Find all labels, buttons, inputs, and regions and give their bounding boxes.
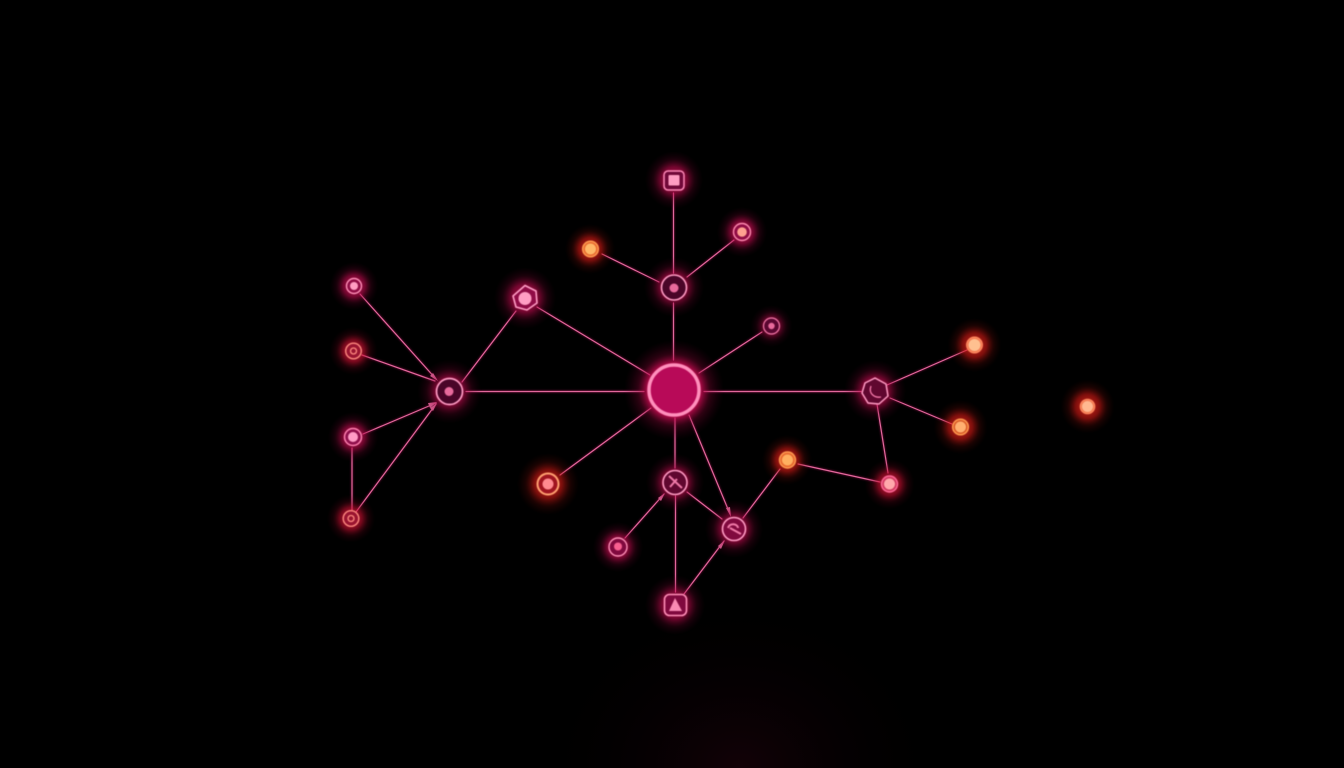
node: isolated far right	[1060, 380, 1114, 434]
node: lower left red	[517, 453, 579, 515]
node: far left bottom	[327, 494, 375, 542]
node: far left third	[328, 412, 378, 462]
node: orange upper left	[565, 224, 615, 274]
node: upper hub	[644, 257, 704, 317]
node: far left second	[330, 327, 378, 375]
node: right orange lower	[934, 400, 988, 454]
node: left hub	[418, 360, 482, 424]
connecting lines	[352, 193, 967, 594]
node: lower right hub	[705, 500, 763, 558]
node: orange lower middle	[762, 435, 812, 485]
arrowheads	[428, 373, 731, 549]
node: lower small left	[593, 522, 643, 572]
central hub node	[624, 340, 724, 440]
node: right hub hexagon	[844, 360, 906, 422]
node: bottom rounded square with triangle	[645, 575, 705, 635]
node: lower hub	[646, 454, 704, 512]
node: right lower pink	[864, 459, 914, 509]
node: top square	[645, 151, 703, 209]
node: far left top	[330, 262, 378, 310]
node: right small	[750, 305, 792, 347]
node: upper right	[717, 207, 767, 257]
node: right orange top	[948, 318, 1002, 372]
node: upper left hexagon	[494, 267, 556, 329]
